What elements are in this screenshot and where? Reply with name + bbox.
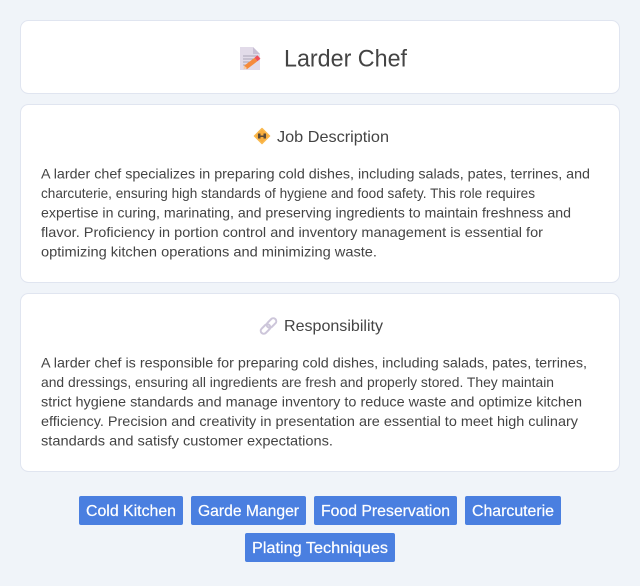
tag: Cold Kitchen bbox=[79, 496, 183, 525]
text block: job description: optimizing kitchen operations and minimizing waste. bbox=[41, 244, 377, 260]
tag: Charcuterie bbox=[465, 496, 561, 525]
icon: orange diamond sign bbox=[254, 128, 270, 144]
heading: Larder Chef: Larder Chef bbox=[284, 46, 407, 72]
text block: responsibility: and dressings, ensuring all ingredients are fresh and properly stored. They maintain bbox=[41, 374, 554, 390]
tag: Cold Kitchen: Cold Kitchen bbox=[86, 503, 176, 520]
tag: Charcuterie: Charcuterie bbox=[472, 503, 554, 520]
heading: Job Description: Job Description bbox=[277, 129, 389, 146]
heading: Responsibility: Responsibility bbox=[284, 318, 383, 335]
text block: responsibility: strict hygiene standards and manage inventory to reduce waste and optimize kitchen bbox=[41, 394, 582, 410]
tag: Garde Manger bbox=[191, 496, 306, 525]
text block: job description: flavor. Proficiency in portion control and inventory management is essential for bbox=[41, 224, 543, 240]
icon: chain link bbox=[259, 317, 278, 335]
tag: Plating Techniques bbox=[245, 533, 395, 562]
text block: job description: charcuterie, ensuring high standards of hygiene and food safety. This role requires bbox=[41, 185, 535, 201]
text block: job description: expertise in curing, marinating, and preserving ingredients to maintain freshness and bbox=[41, 204, 571, 220]
text block: responsibility: A larder chef is responsible for preparing cold dishes, including salads, pates, terrines, bbox=[41, 354, 587, 370]
tag: Food Preservation: Food Preservation bbox=[321, 503, 450, 520]
tag: Food Preservation bbox=[314, 496, 457, 525]
text block: responsibility bbox=[41, 354, 587, 448]
panel: responsibility bbox=[20, 294, 620, 472]
text block: job description: A larder chef specializes in preparing cold dishes, including salads, pates, terrines, and bbox=[41, 166, 590, 182]
tag: Garde Manger: Garde Manger bbox=[198, 503, 300, 520]
tag: Plating Techniques: Plating Techniques bbox=[252, 540, 388, 557]
tags bbox=[79, 496, 561, 562]
text block: job description bbox=[41, 166, 590, 260]
text block: responsibility: standards and satisfy customer expectations. bbox=[41, 432, 333, 448]
panel: title bbox=[20, 20, 620, 94]
panel: job description bbox=[20, 104, 620, 282]
icon: memo with pencil bbox=[240, 47, 260, 70]
text block: responsibility: efficiency. Precision and creativity in presentation are essential to meet high culinary bbox=[41, 413, 578, 429]
